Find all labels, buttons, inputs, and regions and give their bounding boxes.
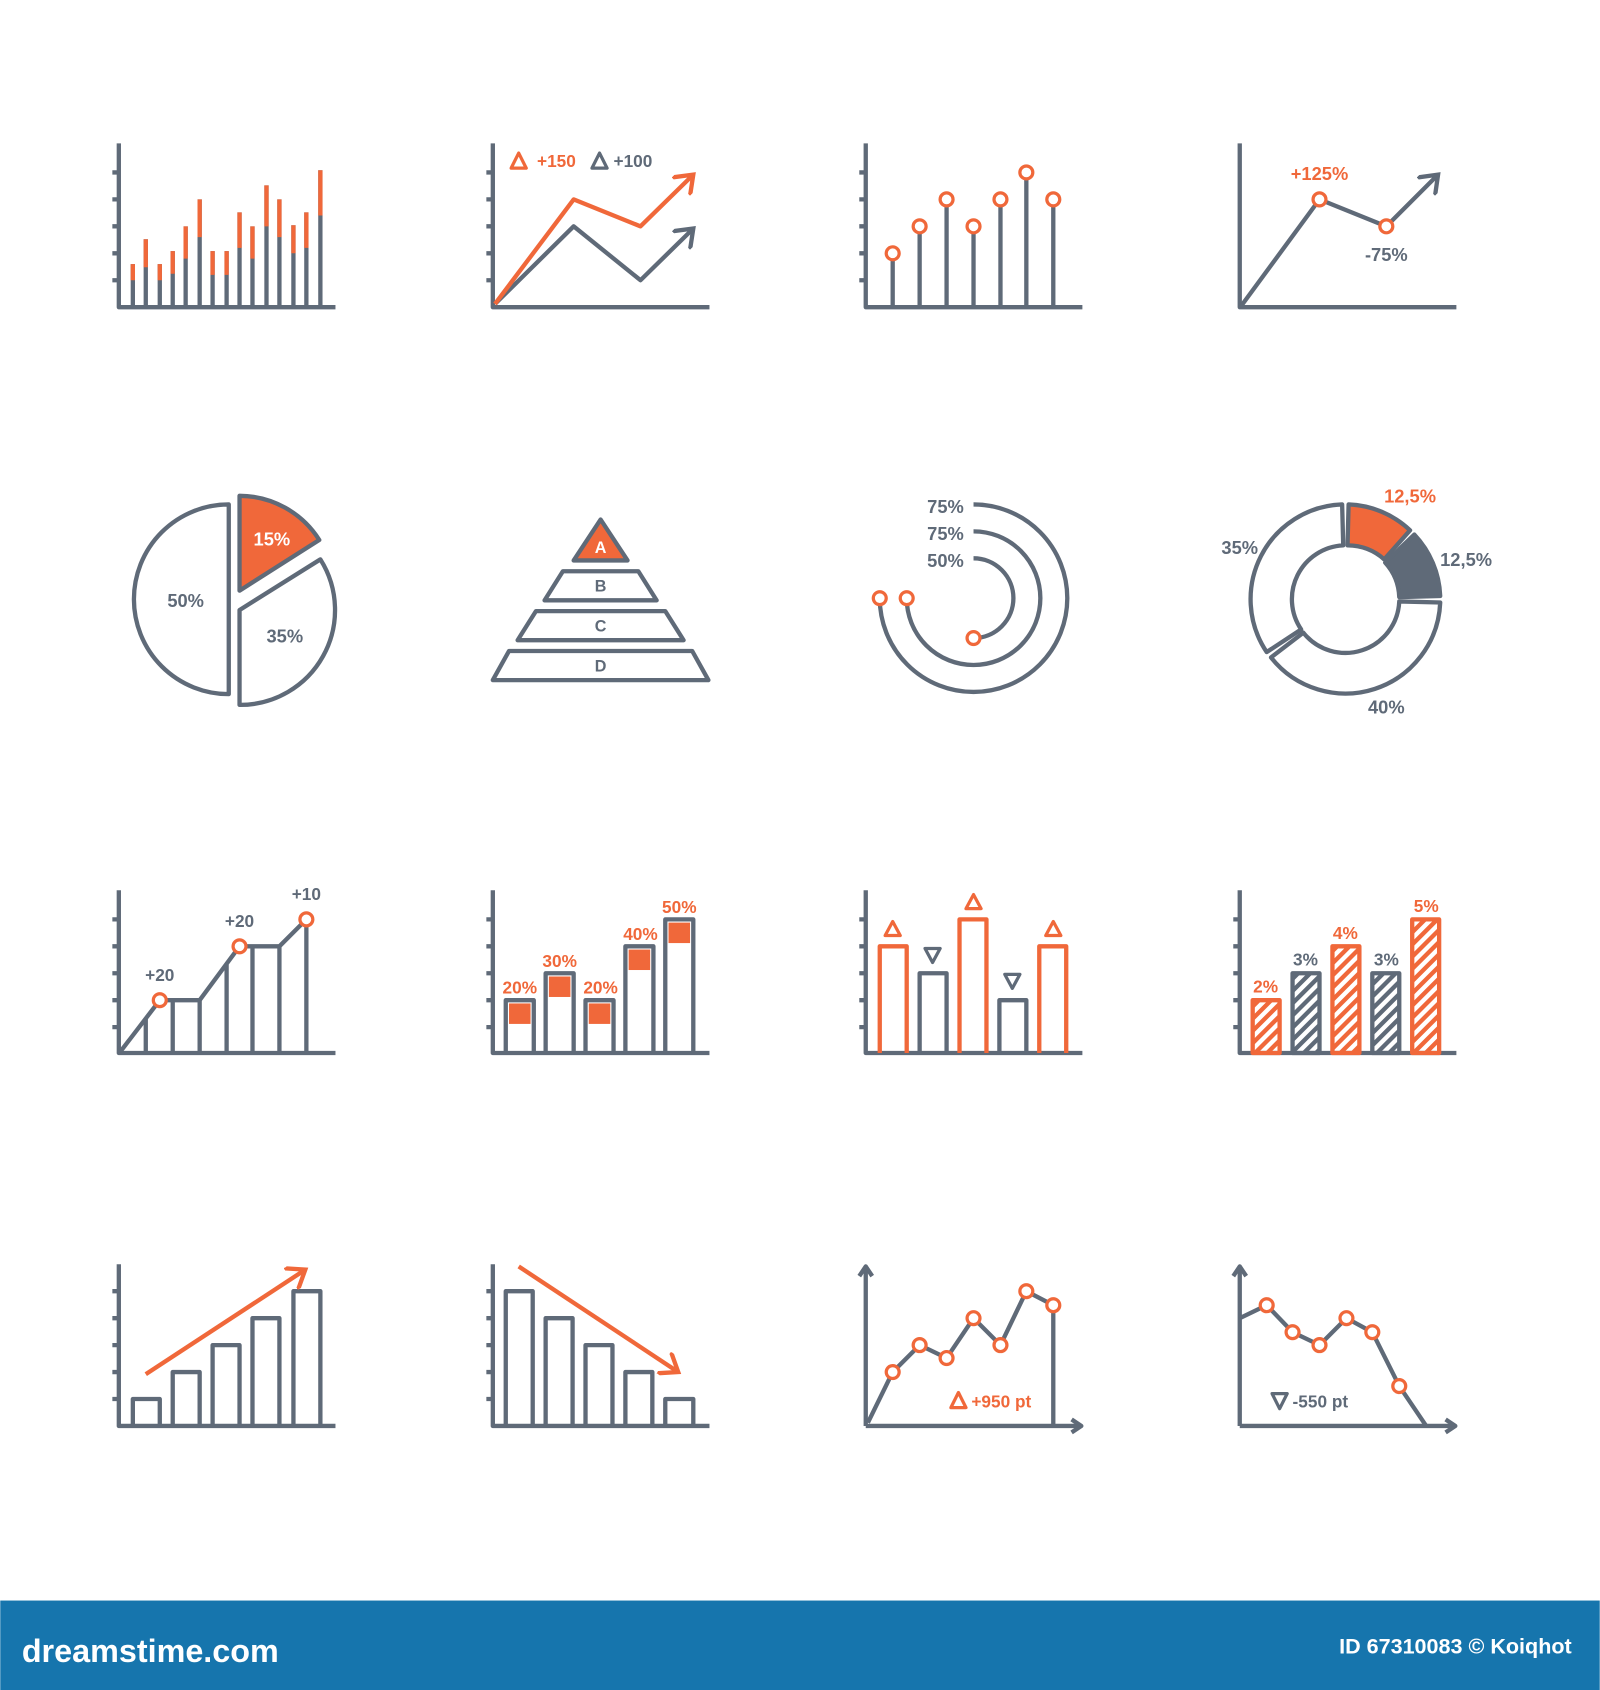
icon: pie chart: 15% <box>254 528 290 549</box>
icon: dual line chart: +150 <box>537 151 576 171</box>
icon: area step chart: +20 <box>145 965 174 985</box>
icon: percentage bars: 20% <box>583 978 618 998</box>
icon: pyramid: B <box>595 578 606 596</box>
icon: pyramid <box>493 520 708 680</box>
icon: percentage bars: 40% <box>623 924 658 944</box>
icon: lollipop chart <box>859 143 1082 307</box>
icon: concentric arcs: 50% <box>927 550 964 571</box>
icon: pyramid: D <box>595 657 606 675</box>
icon: line growth chart: +125% <box>1291 163 1348 184</box>
icon: falling line with points <box>1233 1266 1455 1432</box>
icon: percentage bars: 20% <box>503 978 537 998</box>
icon: rising line with points: +950 pt <box>971 1392 1032 1412</box>
icon: pie chart: 50% <box>167 590 204 611</box>
icon: hatched bars: 3% <box>1293 950 1318 970</box>
icon: area step chart: +20 <box>225 911 254 931</box>
icon: hatched bars: 2% <box>1253 977 1278 997</box>
icon: percentage bars: 30% <box>542 951 577 971</box>
icon: rising line with points <box>859 1266 1081 1432</box>
icon: dual line chart <box>486 143 709 307</box>
icon: up/down bars <box>859 890 1082 1053</box>
icon: hatched bars: 3% <box>1374 950 1399 970</box>
icon: hatched bars: 4% <box>1333 923 1358 943</box>
icon: donut chart: 35% <box>1221 537 1258 558</box>
icon: percentage bars <box>486 890 709 1053</box>
icon: donut chart: 40% <box>1368 697 1405 718</box>
icon: donut chart: 12,5% <box>1440 549 1492 570</box>
footer bar: dreamstime.com <box>22 1633 279 1669</box>
icon: dual line chart: +100 <box>614 151 652 171</box>
icon: pie chart <box>134 496 335 705</box>
icon: stacked bar chart <box>112 143 335 307</box>
icon: area step chart <box>112 884 335 1053</box>
icon: percentage bars: 50% <box>662 897 697 917</box>
icon: rising bars with arrow <box>112 1264 335 1426</box>
footer bar: ID 67310083 © Koiqhot <box>1339 1633 1572 1658</box>
icon: hatched bars <box>1233 890 1456 1053</box>
icon: area step chart: +10 <box>292 884 321 904</box>
icon: pyramid: C <box>595 618 607 636</box>
icon: donut chart <box>1221 485 1492 718</box>
icon: concentric arcs <box>873 496 1067 692</box>
icon: concentric arcs: 75% <box>927 496 964 517</box>
icon: hatched bars: 5% <box>1414 896 1439 916</box>
icon: falling line with points: -550 pt <box>1293 1392 1348 1412</box>
icon: line growth chart: -75% <box>1365 244 1408 265</box>
icon: falling bars with arrow <box>486 1264 709 1426</box>
icon: pie chart: 35% <box>266 625 303 646</box>
icon: concentric arcs: 75% <box>927 523 964 544</box>
icon: donut chart: 12,5% <box>1384 485 1436 506</box>
icon: line growth chart <box>1240 143 1456 307</box>
icon: pyramid: A <box>595 539 607 557</box>
footer bar <box>0 1601 1600 1690</box>
